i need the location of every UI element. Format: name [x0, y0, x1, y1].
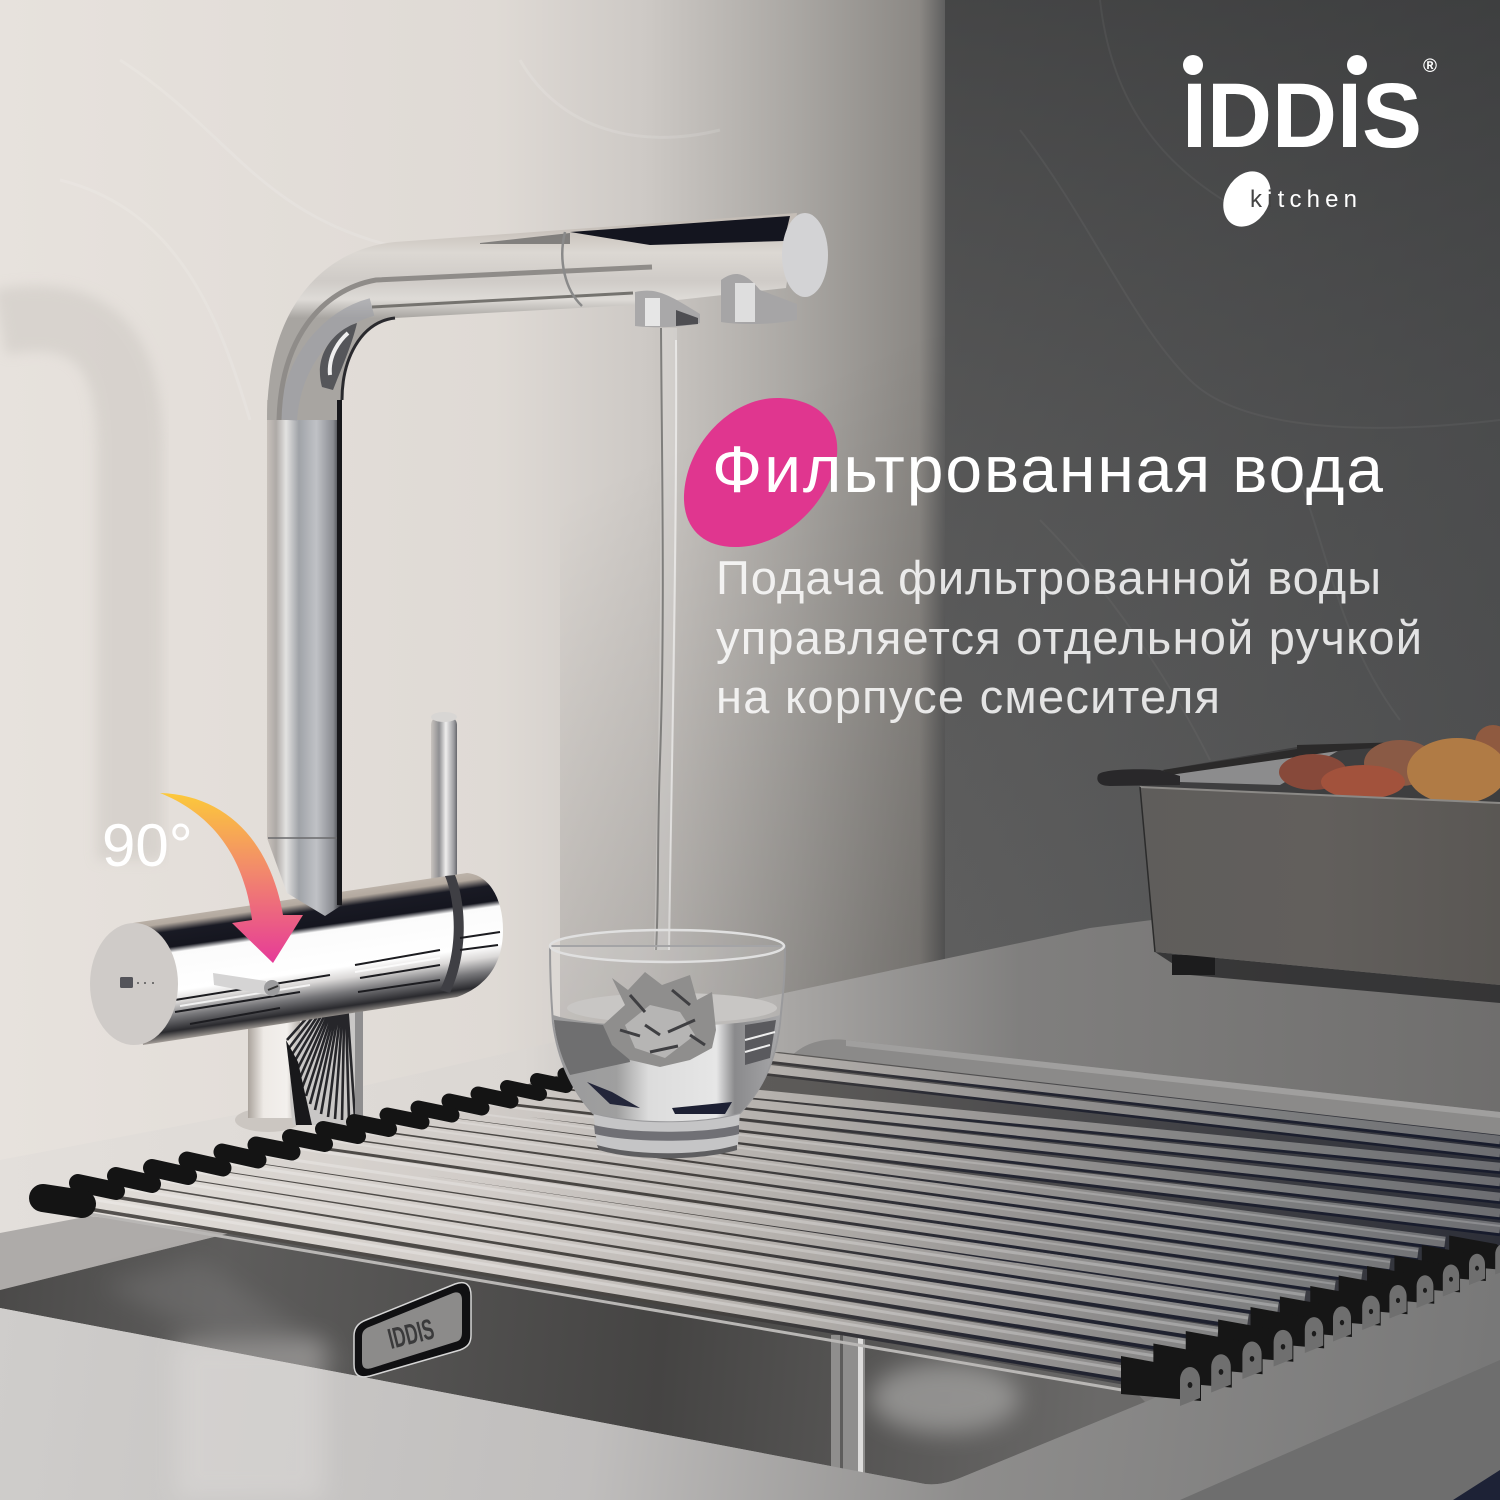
small handle knob	[213, 973, 280, 996]
tray rim and mesh	[1140, 742, 1500, 803]
kitchen sub-logo	[1214, 163, 1357, 235]
indicator icon	[120, 977, 154, 988]
description text: управляется отдельной ручкой	[716, 611, 1422, 664]
counter front with sink edge	[0, 1250, 1500, 1500]
mixer end cap	[90, 923, 178, 1045]
sink opening	[0, 1039, 1500, 1484]
left rod caps	[43, 1074, 588, 1204]
heading: Фильтрованная вода	[712, 432, 1383, 506]
sink brand badge: IDDIS	[385, 1314, 437, 1356]
kitchen counter top	[0, 880, 1500, 1500]
glass bowl upper	[550, 946, 785, 1121]
kitchen sub-logo: kitchen	[1250, 186, 1357, 213]
water surface	[567, 993, 777, 1023]
rack rods	[60, 1044, 1500, 1380]
sink brand badge	[354, 1283, 471, 1377]
drain pipe	[831, 1335, 865, 1473]
description text: на корпусе смесителя	[716, 670, 1220, 723]
pink accent blob	[684, 398, 837, 547]
faucet base stem	[235, 968, 363, 1132]
horizontal mixer body	[90, 873, 503, 1045]
drying rack	[43, 1044, 1500, 1406]
drinking glass	[550, 930, 785, 1158]
water stream	[654, 328, 677, 950]
water reflections	[554, 1020, 776, 1114]
description text: Подача фильтрованной воды	[716, 551, 1381, 604]
glass foot	[593, 1110, 740, 1158]
tray handle	[1097, 769, 1180, 786]
iddis logo: IDDIS	[1182, 65, 1422, 167]
faucet	[90, 213, 828, 1132]
glass rim	[550, 930, 784, 962]
water splash	[603, 972, 716, 1067]
faucet spout and column	[267, 213, 797, 916]
rotation arrow	[160, 793, 303, 963]
fruit	[1279, 725, 1500, 804]
right rod caps	[1121, 1236, 1500, 1406]
spout end disc	[782, 213, 828, 297]
tray body	[1140, 787, 1500, 985]
90 degree label: 90°	[102, 812, 193, 879]
registered mark: ®	[1423, 56, 1437, 77]
description text	[716, 551, 1422, 723]
rack front reflection	[90, 1214, 1122, 1390]
glass water	[553, 1015, 780, 1121]
filter lever handle	[431, 712, 457, 880]
water nozzles	[635, 274, 797, 327]
fruit tray	[1097, 725, 1500, 1003]
